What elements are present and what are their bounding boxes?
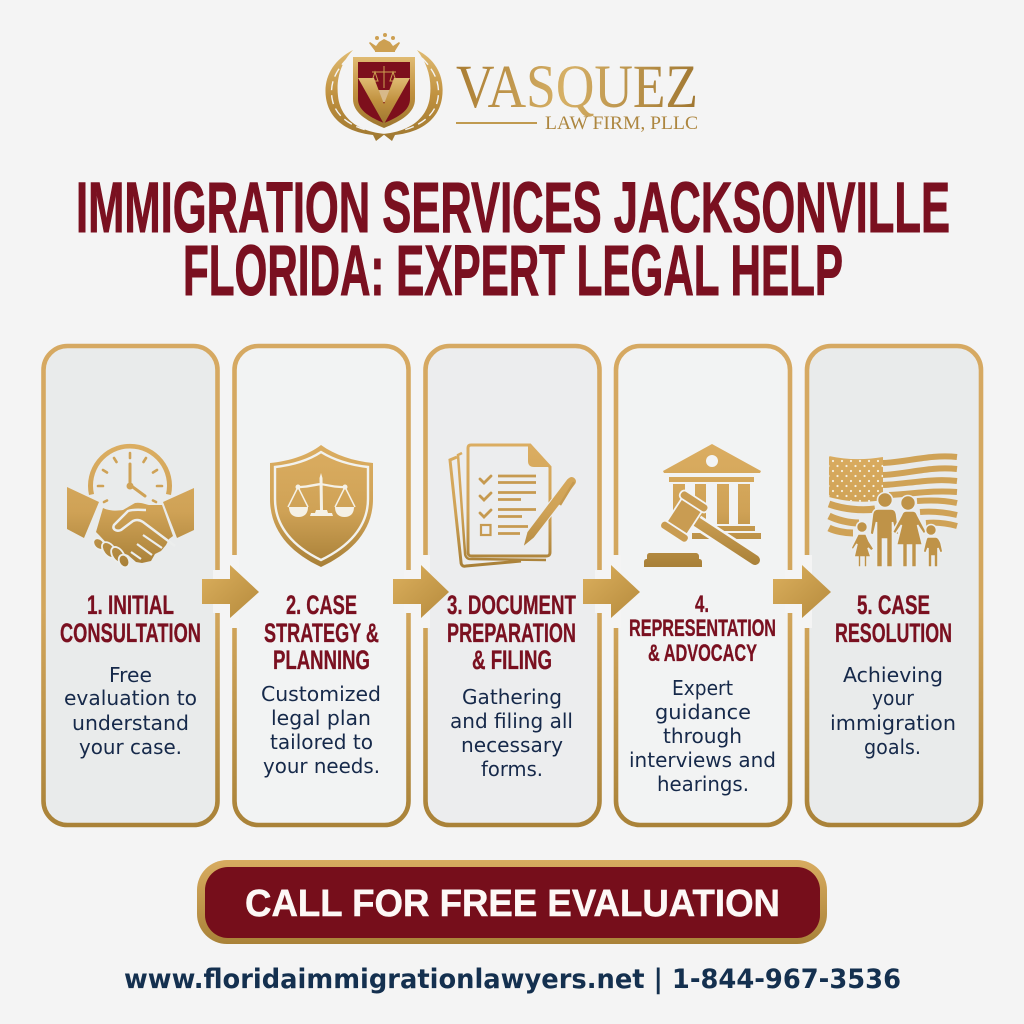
icon: left laurel	[325, 50, 385, 141]
step 4 heading	[629, 591, 776, 667]
arrow: step 3 to 4	[583, 565, 640, 618]
step 5 text: your	[872, 686, 915, 710]
panel: step 2 box	[234, 346, 408, 825]
step 3 heading: 3. DOCUMENT	[447, 590, 576, 620]
step 1 heading	[60, 590, 201, 648]
panel: step 4 box	[616, 346, 790, 825]
arrow: step 1 to 2	[202, 565, 259, 618]
step 4 text: through	[663, 724, 742, 748]
step 5 text: goals.	[864, 735, 921, 759]
step 2 heading: PLANNING	[273, 645, 370, 675]
step 4 text: interviews and	[629, 748, 776, 772]
step 5 text: Achieving	[843, 663, 943, 687]
step 3 heading: PREPARATION	[447, 618, 576, 648]
icon: shield with scales	[270, 445, 373, 567]
icon: crown	[369, 33, 400, 52]
step 2 text	[261, 682, 381, 778]
step 3 heading	[447, 590, 576, 675]
step 2 heading: 2. CASE	[286, 590, 357, 620]
button label: CALL FOR FREE EVALUATION	[245, 883, 780, 925]
step 3 text	[450, 685, 573, 781]
step 1 heading: CONSULTATION	[60, 618, 201, 648]
logo wordmark: VASQUEZ	[456, 54, 698, 121]
step 3 text: necessary	[461, 733, 563, 757]
step 3 text: forms.	[481, 757, 543, 781]
arrow: step 4 to 5	[773, 565, 831, 618]
icon: flag and family	[829, 456, 957, 567]
step 1 text: evaluation to	[64, 686, 197, 710]
panel: step 3 box	[426, 346, 600, 825]
step 4 text: Expert	[672, 676, 733, 700]
step 2 heading: STRATEGY &	[264, 618, 379, 648]
logo sub-line: LAW FIRM, PLLC	[545, 114, 698, 134]
step 5 text: immigration	[830, 711, 956, 735]
step 1 text: Free	[109, 663, 152, 687]
step 2 text: Customized	[261, 682, 381, 706]
step 4 heading: REPRESENTATION	[629, 615, 776, 642]
step 1 heading: 1. INITIAL	[87, 590, 174, 620]
arrow: step 2 to 3	[393, 565, 449, 618]
step 2 text: your needs.	[263, 754, 380, 778]
footer contact line: www.floridaimmigrationlawyers.net | 1-844-967-3536	[124, 964, 901, 995]
step 5 text	[830, 663, 956, 759]
arrow halos	[213, 555, 812, 628]
step 4 text: guidance	[655, 700, 751, 724]
step 5 heading	[835, 590, 952, 648]
step 1 text: understand	[72, 711, 189, 735]
icon: documents and pen	[450, 445, 576, 566]
step 2 text: tailored to	[270, 730, 373, 754]
icon: clock and handshake	[67, 444, 194, 569]
step 3 text: and filing all	[450, 709, 573, 733]
step 1 text	[64, 663, 197, 759]
logo rule	[456, 122, 537, 124]
step 4 text: hearings.	[657, 772, 749, 796]
title	[76, 169, 950, 311]
step 1 text: your case.	[79, 735, 182, 759]
logo: Vasquez Law Firm	[325, 33, 698, 141]
icon: shield	[353, 57, 415, 128]
step 5 heading: RESOLUTION	[835, 618, 952, 648]
step 3 text: Gathering	[462, 685, 562, 709]
panel: step 5 box	[807, 346, 981, 825]
step 4 heading: & ADVOCACY	[648, 640, 757, 667]
step 4 heading: 4.	[695, 591, 709, 618]
step 2 text: legal plan	[271, 706, 371, 730]
icon: right laurel	[383, 50, 443, 141]
call to action button	[197, 860, 827, 944]
step 3 heading: & FILING	[472, 645, 552, 675]
step 2 heading	[264, 590, 379, 675]
icon: courthouse and gavel	[644, 444, 761, 567]
panel: step 1 box	[44, 346, 218, 825]
step 5 heading: 5. CASE	[857, 590, 930, 620]
step 4 text	[629, 676, 776, 796]
